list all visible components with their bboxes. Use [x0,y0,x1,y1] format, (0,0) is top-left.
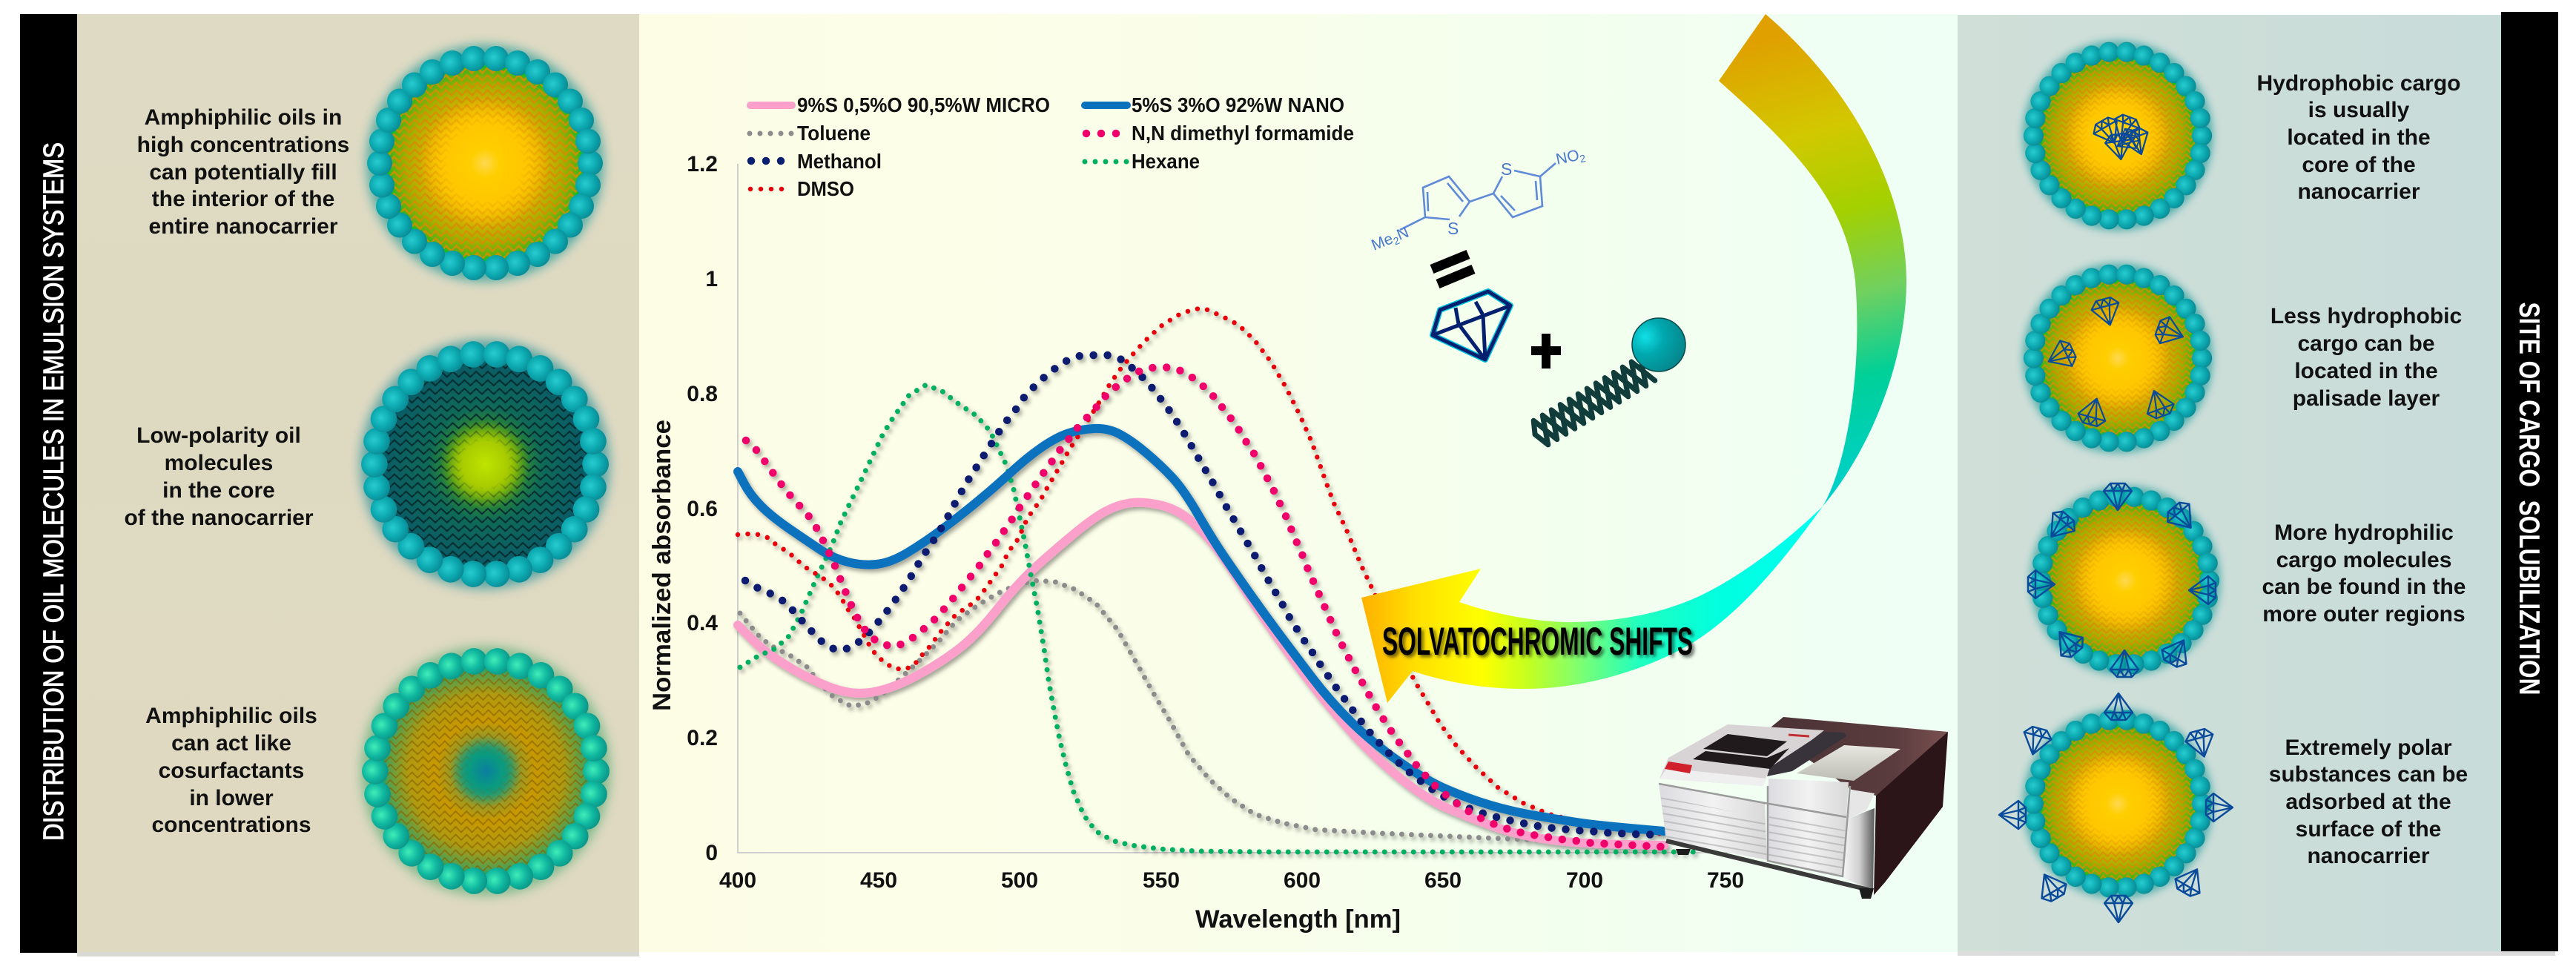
instrument slats [1661,797,1846,875]
text: less hydrophobic cargo: cargo can be [2297,331,2435,356]
legend item: hexane: Hexane [1132,150,1200,173]
y-axis tick labels: 0.8 [687,382,718,406]
text: extremely polar substances: adsorbed at the [2285,790,2451,814]
legend item: dmf: N,N dimethyl formamide [1132,122,1354,145]
instrument base [1666,841,1869,890]
y-axis tick labels: 0.2 [687,726,718,750]
instrument top surface [1767,717,1948,796]
instrument dark side [1874,732,1948,895]
text: amphiphilic oils as cosurfactants: Amphiphilic oils [145,704,317,728]
text: more hydrophilic cargo: More hydrophilic [2274,521,2454,545]
text: amphiphilic oils high concentrations: high concentrations [137,133,349,157]
nanocarrier: oil in core [360,340,610,589]
text: hydrophobic cargo: nanocarrier [2297,179,2420,204]
surfactant tail [1528,357,1655,448]
panel bottom shadow [1958,951,2555,956]
panel: oil distribution [20,14,639,956]
text: more hydrophilic cargo: cargo molecules [2276,548,2451,572]
right vertical heading [2501,12,2558,951]
right vertical heading: SITE OF CARGO SOLUBILIZATION [2513,303,2545,695]
curve: toluene [740,581,1664,845]
instrument lid arm [1767,732,1846,776]
text: amphiphilic oils as cosurfactants: cosurfactants [159,759,304,783]
text: more hydrophilic cargo: can be found in the [2262,575,2466,599]
icon: cargo diamond [1433,291,1510,360]
x-axis title: Wavelength [nm] [1195,905,1401,934]
cargo cluster [2090,113,2154,161]
x-axis tick labels [719,868,1744,893]
instrument door [1768,779,1849,875]
instrument lid front band [1659,768,1767,786]
y-axis tick labels [687,152,718,865]
diamond cyan edge [1433,291,1510,360]
text: more hydrophilic cargo: more outer regions [2262,602,2466,627]
text: amphiphilic oils as cosurfactants: can act like [171,731,291,756]
left vertical heading: DISTRIBUTION OF OIL MOLECULES IN EMULSION SYSTEMS [39,142,70,841]
left vertical heading [20,14,77,953]
palisade cargo [2043,296,2187,428]
icon: plus sign [1531,334,1561,369]
curve: nano emulsion [738,429,1664,831]
x-axis tick labels: 400 [719,868,756,893]
molecule structure: 2 [1392,234,1401,248]
instrument corner lower [1844,808,1875,890]
text: less hydrophobic cargo: Less hydrophobic [2270,304,2462,328]
nanocarrier: cargo at surface [1999,693,2233,922]
nanocarrier: cargo in palisade layer [2023,263,2213,453]
arrow: solvatochromic shift swoosh [1361,14,1906,703]
icon: equals sign [1432,254,1473,284]
text: amphiphilic oils high concentrations: entire nanocarrier [148,214,338,239]
text: extremely polar substances: Extremely polar [2285,736,2452,760]
instrument corner upper [1846,790,1875,819]
diamond navy outline and facets [1433,291,1510,360]
x-axis tick labels: 600 [1284,868,1321,893]
nanocarrier: cosurfactant oil [361,647,610,896]
text: hydrophobic cargo: Hydrophobic cargo [2256,71,2461,96]
panel background left [77,14,639,956]
panel bottom shadow [77,952,639,956]
molecule structure: N [1395,224,1411,244]
nanocarrier: cargo in outer regions [2028,483,2220,677]
text: extremely polar substances: nanocarrier [2307,844,2430,868]
text: less hydrophobic cargo: located in the [2294,359,2438,383]
text: amphiphilic oils high concentrations: can potentially fill [149,160,337,185]
x-axis tick labels: 550 [1143,868,1180,893]
instrument seams [1659,784,1850,876]
text: hydrophobic cargo: is usually [2308,98,2410,122]
molecule structure: S [1447,219,1459,238]
text: amphiphilic oils high concentrations: Amphiphilic oils in [145,105,342,130]
surface-adsorbed cargo [1999,693,2233,922]
text: extremely polar substances: substances can be [2269,762,2468,787]
legend item: dmso [750,177,854,200]
y-axis tick labels: 0 [705,841,718,865]
curve: DMSO [738,308,1664,834]
x-axis tick labels: 700 [1566,868,1603,893]
curve: micro emulsion [738,503,1664,845]
molecule structure: 2 [1579,152,1587,165]
text: less hydrophobic cargo: palisade layer [2293,386,2440,411]
panel background right [1958,15,2501,956]
text: hydrophobic cargo: located in the [2287,125,2431,150]
legend [750,93,1354,200]
molecule structure: Me [1369,230,1396,254]
data curves [738,308,1694,852]
x-axis tick labels: 500 [1001,868,1038,893]
text: low-polarity oil molecules: molecules [165,451,273,475]
molecule structure: NO [1554,147,1581,168]
arrow label: solvatochromic shifts: SOLVATOCHROMIC SHIFTS [1382,620,1693,664]
legend item: micro: 9%S 0,5%O 90,5%W MICRO [797,93,1050,116]
instrument light tray [1797,745,1900,781]
panel: central chart background [639,14,1958,952]
text: hydrophobic cargo: core of the [2302,153,2416,177]
nanocarrier: cargo in core [2023,41,2213,231]
chart axes [738,164,1728,853]
text: amphiphilic oils high concentrations: the interior of the [152,187,334,211]
text: low-polarity oil molecules: of the nanocarrier [124,506,314,530]
curve: N,N dimethyl formamide [746,367,1662,847]
text: extremely polar substances: surface of the [2296,817,2441,842]
text: low-polarity oil molecules: Low-polarity oil [136,423,301,448]
instrument feet [1676,849,1874,899]
panel: cargo solubilization [1958,12,2558,956]
instrument lid [1659,724,1824,786]
nanocarrier: filled with oil [366,44,604,282]
instrument red badge [1665,761,1692,773]
surfactant head [1632,318,1685,371]
spectrophotometer [1659,717,1948,899]
outer-region cargo [2028,483,2216,677]
instrument red strip [1789,735,1809,736]
legend item: nano: 5%S 3%O 92%W NANO [1132,93,1344,116]
curve: methanol [745,355,1662,835]
legend item: dmso: DMSO [797,177,854,200]
molecule structure [1369,145,1587,255]
text: low-polarity oil molecules: in the core [162,478,275,503]
y-axis tick labels: 0.4 [687,611,718,635]
icon: surfactant molecule [1528,318,1685,448]
arrow lower sweep and head [1361,506,1823,703]
x-axis tick labels: 650 [1424,868,1462,893]
arrow upper sweep [1719,14,1906,506]
molecule structure: S [1501,159,1512,179]
x-axis tick labels: 450 [860,868,897,893]
chart: normalized absorbance vs wavelength [648,93,1744,934]
y-axis tick labels: 0.6 [687,497,718,521]
y-axis tick labels: 1 [705,267,718,291]
legend item: toluene: Toluene [797,122,871,145]
y-axis tick labels: 1.2 [687,152,718,176]
instrument screens [1693,734,1789,769]
text: amphiphilic oils as cosurfactants: concentrations [151,813,311,837]
text: amphiphilic oils as cosurfactants: in lower [189,786,274,810]
legend item: methanol: Methanol [797,150,882,173]
x-axis tick labels: 750 [1707,868,1744,893]
curve: hexane [740,385,1694,852]
instrument front left [1659,784,1767,860]
y-axis title: Normalized absorbance [648,420,676,711]
